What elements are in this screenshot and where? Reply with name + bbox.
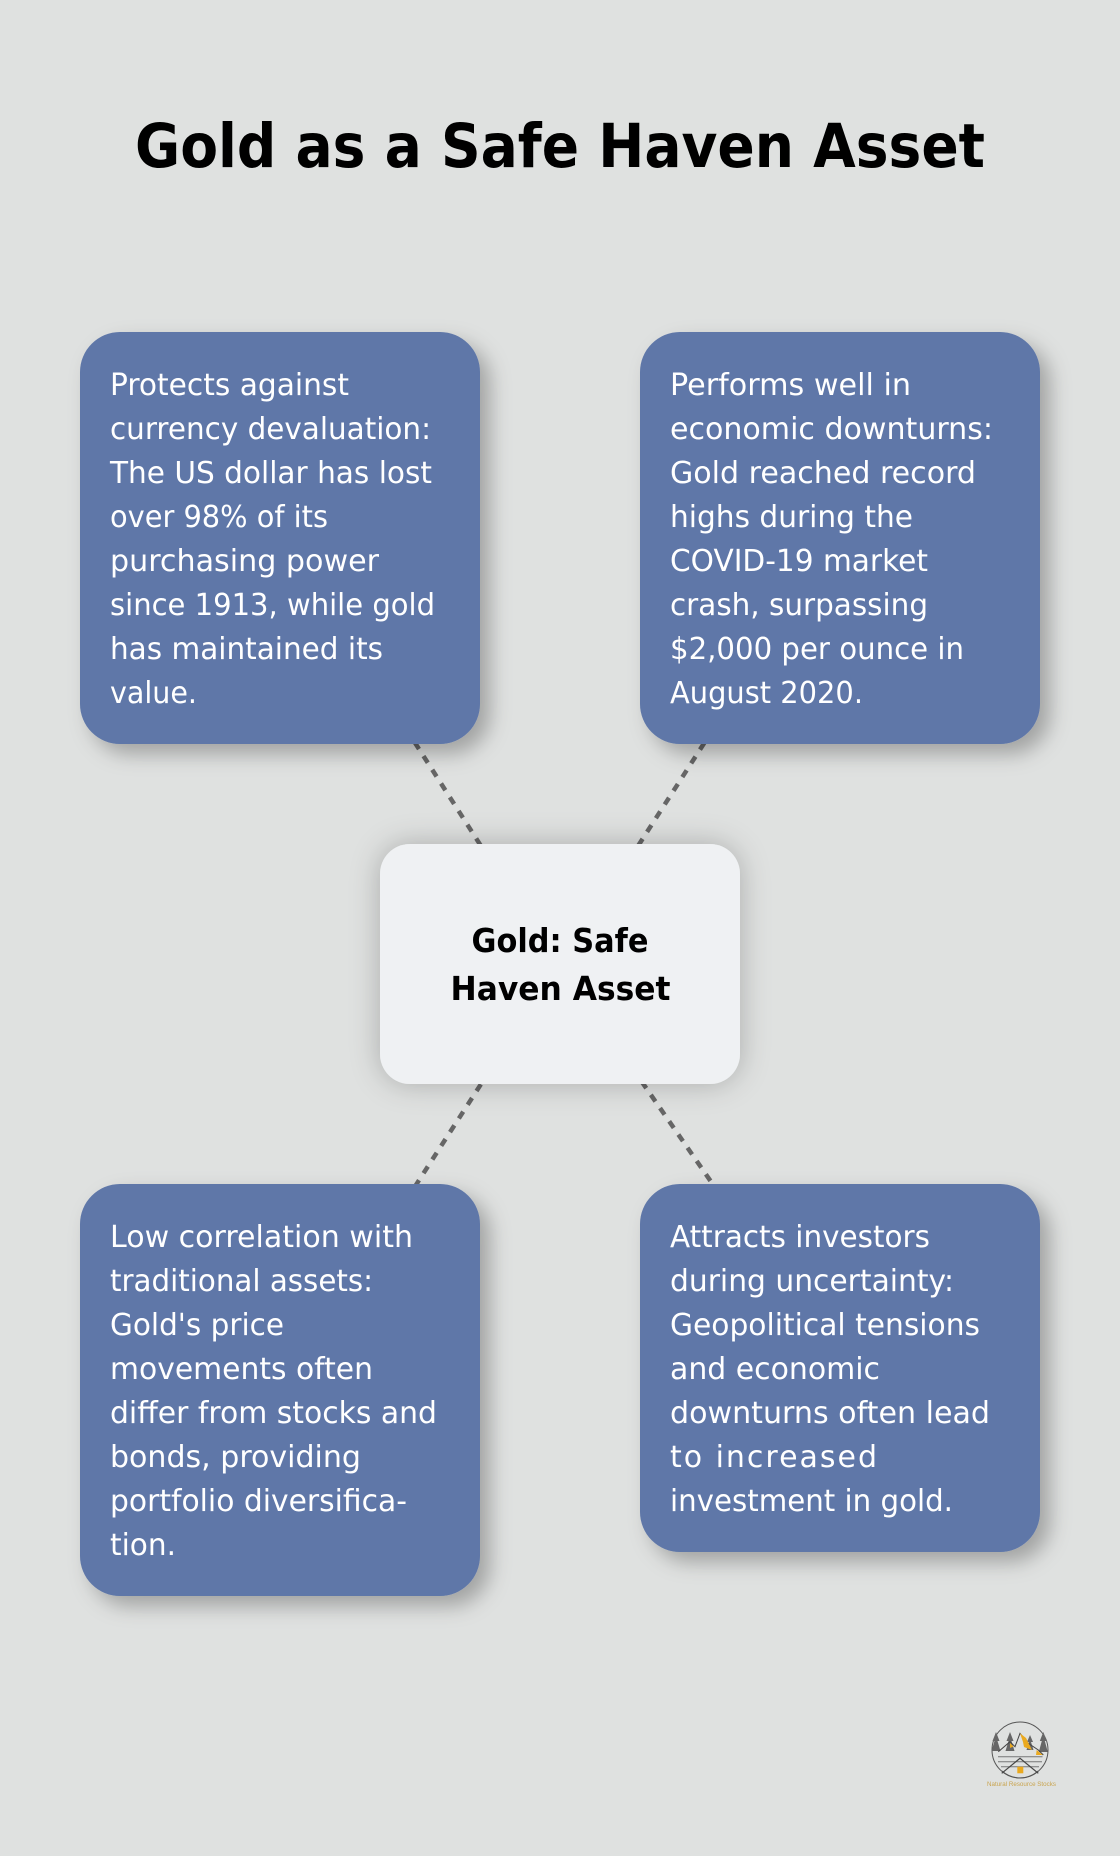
panel: uncertainty: to increased	[670, 1440, 877, 1475]
panel: economic downturns: economic downturns:	[670, 412, 993, 447]
panel: currency devaluation: currency devaluation:	[110, 412, 431, 447]
panel: currency devaluation: since 1913, while gold	[110, 588, 435, 623]
panel: low correlation: traditional assets:	[110, 1264, 373, 1299]
panel: uncertainty	[640, 1184, 1040, 1552]
panel: central node: Haven Asset	[450, 969, 671, 1008]
panel: currency devaluation: has maintained its	[110, 632, 383, 667]
panel: low correlation: portfolio diversifica-	[110, 1484, 407, 1519]
panel: low correlation: movements often	[110, 1352, 373, 1387]
panel: currency devaluation: Protects against	[110, 368, 349, 403]
dashed connector: top right	[638, 743, 704, 846]
panel: economic downturns: $2,000 per ounce in	[670, 632, 964, 667]
dashed connector: bottom left	[414, 1071, 490, 1188]
panel: uncertainty: during uncertainty:	[670, 1264, 954, 1299]
dashed connector: top left	[415, 742, 481, 846]
panel: uncertainty: Geopolitical tensions	[670, 1308, 980, 1343]
panel: currency devaluation: over 98% of its	[110, 500, 328, 535]
panel: low correlation: Gold's price	[110, 1308, 284, 1343]
panel: low correlation	[80, 1184, 480, 1596]
title: Gold as a Safe Haven Asset	[135, 111, 985, 182]
panel: currency devaluation: The US dollar has lost	[109, 456, 432, 491]
panel: uncertainty: Attracts investors	[670, 1220, 930, 1255]
panel: uncertainty: and economic	[670, 1352, 880, 1387]
panel: economic downturns	[640, 332, 1040, 744]
icon: Natural Resource Stocks logo	[987, 1722, 1057, 1788]
panel: currency devaluation	[80, 332, 480, 744]
panel: economic downturns: COVID-19 market	[670, 544, 928, 579]
panel: currency devaluation: value.	[110, 676, 197, 711]
icon: Natural Resource Stocks logo: Natural Resource Stocks	[987, 1781, 1057, 1788]
panel: economic downturns: crash, surpassing	[670, 588, 928, 623]
dashed connector: bottom right	[642, 1082, 714, 1186]
panel: economic downturns: August 2020.	[670, 676, 863, 711]
panel: uncertainty: downturns often lead	[670, 1396, 990, 1431]
panel: currency devaluation: purchasing power	[110, 544, 380, 579]
panel: central node: Gold: Safe	[472, 921, 648, 960]
panel: low correlation: Low correlation with	[110, 1220, 413, 1255]
panel: low correlation: tion.	[110, 1528, 176, 1563]
panel: economic downturns: Gold reached record	[670, 456, 976, 491]
panel: economic downturns: highs during the	[670, 500, 913, 535]
panel: central node	[380, 844, 740, 1084]
panel: economic downturns: Performs well in	[670, 368, 911, 403]
panel: low correlation: differ from stocks and	[110, 1396, 437, 1431]
panel: uncertainty: investment in gold.	[670, 1484, 953, 1519]
panel: low correlation: bonds, providing	[110, 1440, 361, 1475]
